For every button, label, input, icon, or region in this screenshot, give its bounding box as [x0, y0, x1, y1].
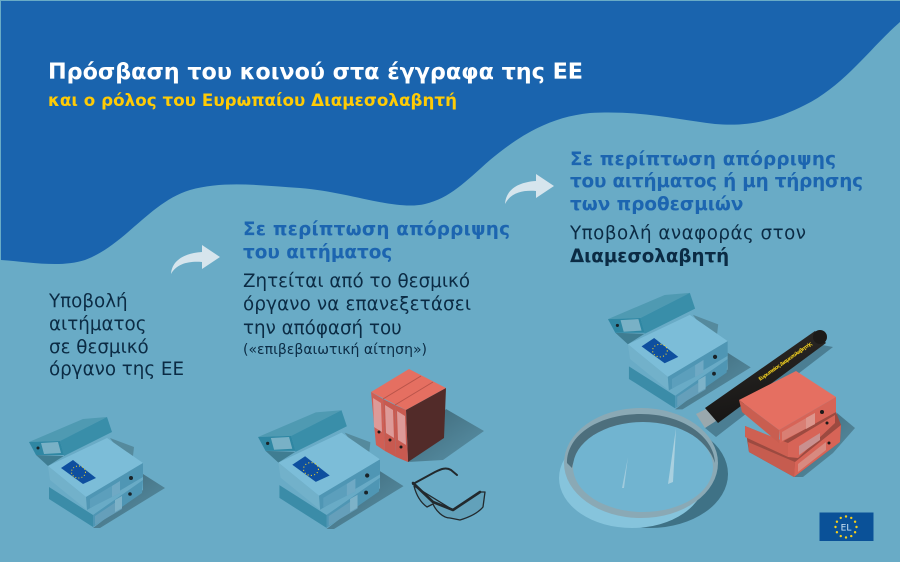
- arrow: step 1 to step 2: [171, 245, 220, 274]
- icon: magnifying glass: Ευρωπαίος Διαμεσολαβητής: [757, 340, 814, 383]
- subtitle: και ο ρόλος του Ευρωπαίου Διαμεσολαβητή: [48, 90, 457, 110]
- step 3 text: Υποβολή αναφοράς στον: [569, 223, 806, 244]
- blue wave band: [1, 1, 900, 264]
- step 3 text: Διαμεσολαβητή: [570, 246, 729, 267]
- step 2 text: την απόφασή του: [243, 318, 402, 339]
- step 3 heading: [570, 149, 863, 215]
- icon: red upright binders: [371, 369, 484, 462]
- step 3 heading: Σε περίπτωση απόρριψης: [570, 149, 836, 170]
- step 2 heading: Σε περίπτωση απόρριψης: [243, 219, 510, 240]
- icon: binder stack, step 3: [608, 293, 751, 409]
- step 2 text: («επιβεβαιωτική αίτηση»): [243, 342, 427, 358]
- step 2 heading: [243, 219, 510, 263]
- step 3 heading: των προθεσμιών: [570, 194, 743, 215]
- step 1 text: αιτήματος: [49, 314, 146, 335]
- step 1 text: [48, 291, 184, 380]
- icon: binder stack, step 1: [29, 417, 165, 528]
- badge: EU flag EL: [820, 512, 874, 541]
- icon: magnifying glass: [559, 330, 833, 528]
- step 3 text: [569, 223, 806, 267]
- title: Πρόσβαση του κοινού στα έγγραφα της ΕΕ: [48, 59, 583, 85]
- icon: binder stack, step 2: [258, 410, 404, 529]
- step 1 text: σε θεσμικό: [49, 337, 149, 358]
- step 3 heading: του αιτήματος ή μη τήρησης: [570, 171, 863, 192]
- step 1 text: όργανο της ΕΕ: [49, 359, 184, 380]
- step 2 text: Ζητείται από το θεσμικό: [243, 271, 470, 292]
- arrow: step 2 to step 3: [505, 174, 554, 204]
- icon: glasses: [413, 469, 485, 520]
- icon: red binder stack: [739, 371, 855, 477]
- step 2 text: [243, 271, 471, 358]
- badge: EU flag EL: EL: [841, 524, 851, 534]
- step 1 text: Υποβολή: [48, 291, 128, 312]
- step 2 heading: του αιτήματος: [243, 242, 392, 263]
- step 2 text: όργανο να επανεξετάσει: [243, 294, 471, 315]
